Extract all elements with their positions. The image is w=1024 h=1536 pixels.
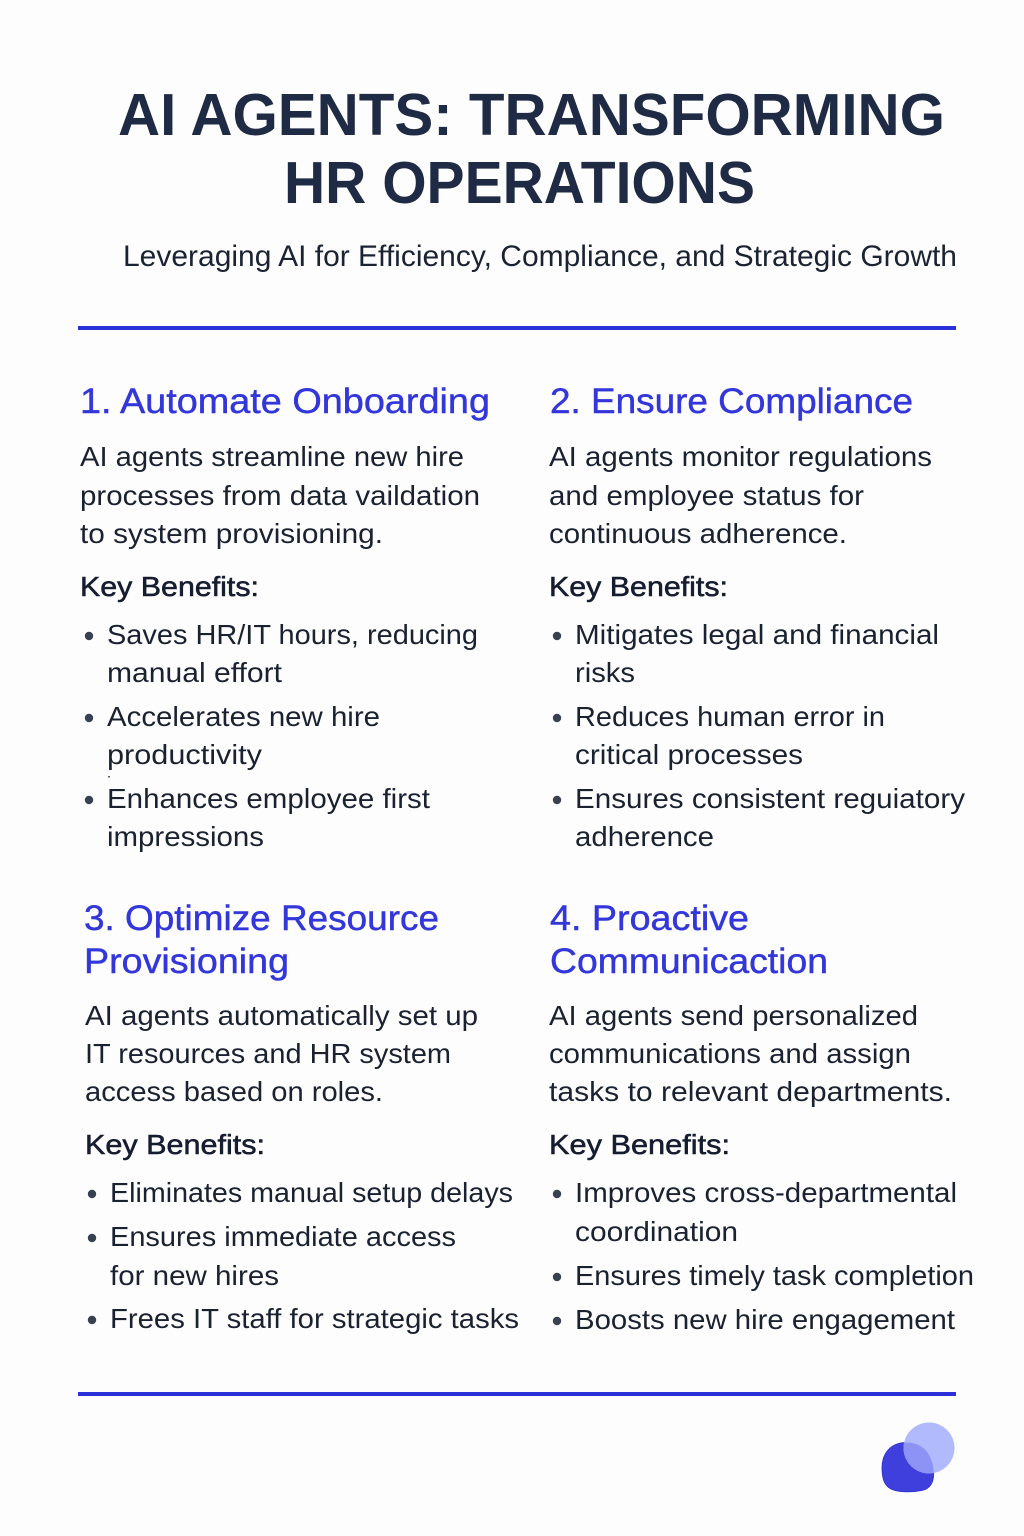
list: onboarding benefits: Enhances employee first [107, 783, 430, 814]
text block: compliance description: and employee status for [549, 480, 864, 511]
heading: Automate Onboarding: 1. Automate Onboarding [80, 382, 490, 421]
text block: communication description: communications and assign [549, 1038, 911, 1069]
heading: Proactive Communicaction: 4. Proactive [550, 899, 749, 938]
list: onboarding benefits: impressions [107, 821, 264, 852]
icon: overlapping logo shapes [882, 1422, 954, 1492]
list: compliance benefits: Reduces human error in [575, 701, 885, 732]
list: compliance benefits [553, 619, 965, 852]
panel: 4. Proactive Communication [549, 899, 974, 1335]
list: compliance benefits: Ensures consistent reguiatory [575, 783, 965, 814]
subheading: key benefits: Key Benefits: [549, 1129, 730, 1160]
text block: onboarding description: to system provisioning. [80, 518, 383, 549]
heading: Optimize Resource Provisioning: 3. Optimize Resource [84, 899, 439, 938]
heading: Ensure Compliance: 2. Ensure Compliance [550, 382, 913, 421]
list: provisioning benefits: Eliminates manual setup delays [110, 1177, 513, 1208]
title: AI AGENTS: TRANSFORMING [118, 82, 945, 148]
list: compliance benefits: adherence [575, 821, 714, 852]
heading: Proactive Communicaction [550, 899, 828, 981]
heading: Proactive Communicaction: Communicaction [550, 942, 828, 981]
list: provisioning benefits [88, 1177, 519, 1334]
subheading: key benefits: Key Benefits: [85, 1129, 265, 1160]
subheading: key benefits: Key Benefits: [80, 571, 259, 602]
text block: compliance description [549, 441, 932, 549]
title: HR OPERATIONS [284, 150, 755, 216]
list: provisioning benefits: Frees IT staff for strategic tasks [110, 1303, 519, 1334]
list: onboarding benefits: manual effort [107, 657, 282, 688]
list: communication benefits [553, 1177, 974, 1335]
text block: communication description: tasks to relevant departments. [549, 1076, 952, 1107]
text block: compliance description: continuous adherence. [549, 518, 847, 549]
list: provisioning benefits: for new hires [110, 1260, 279, 1291]
subtitle: Leveraging AI for Efficiency, Compliance, and Strategic Growth [123, 240, 957, 273]
list: compliance benefits: Mitigates legal and financial [575, 619, 939, 650]
list: communication benefits: coordination [575, 1216, 738, 1247]
list: compliance benefits: critical processes [575, 739, 803, 770]
list: compliance benefits: risks [575, 657, 635, 688]
list: onboarding benefits [85, 619, 478, 852]
list: communication benefits: Ensures timely task completion [575, 1260, 974, 1291]
list: communication benefits: Improves cross-departmental [575, 1177, 957, 1208]
list: onboarding benefits: productivity [107, 739, 262, 770]
text block: onboarding description: processes from data vaildation [80, 480, 480, 511]
panel: 2. Ensure Compliance [549, 382, 965, 852]
text block: provisioning description [85, 1000, 478, 1107]
text block: onboarding description [80, 441, 480, 549]
title [118, 82, 945, 216]
subheading: key benefits: Key Benefits: [549, 571, 728, 602]
text block: compliance description: AI agents monitor regulations [549, 441, 932, 472]
panel: 1. Automate Onboarding [80, 382, 490, 852]
heading: Optimize Resource Provisioning: Provisioning [84, 942, 289, 981]
text block: provisioning description: access based on roles. [85, 1076, 383, 1107]
text block: provisioning description: AI agents automatically set up [85, 1000, 478, 1031]
list: onboarding benefits: Saves HR/IT hours, reducing [107, 619, 478, 650]
text block: communication description [549, 1000, 952, 1107]
panel: 3. Optimize Resource Provisioning [84, 899, 519, 1334]
text block: onboarding description: AI agents streamline new hire [80, 441, 464, 472]
list: communication benefits: Boosts new hire engagement [575, 1304, 955, 1335]
list: provisioning benefits: Ensures immediate access [110, 1221, 456, 1252]
heading: Optimize Resource Provisioning [84, 899, 439, 981]
text block: provisioning description: IT resources and HR system [85, 1038, 451, 1069]
list: onboarding benefits: Accelerates new hire [107, 701, 380, 732]
text block: communication description: AI agents send personalized [549, 1000, 918, 1031]
